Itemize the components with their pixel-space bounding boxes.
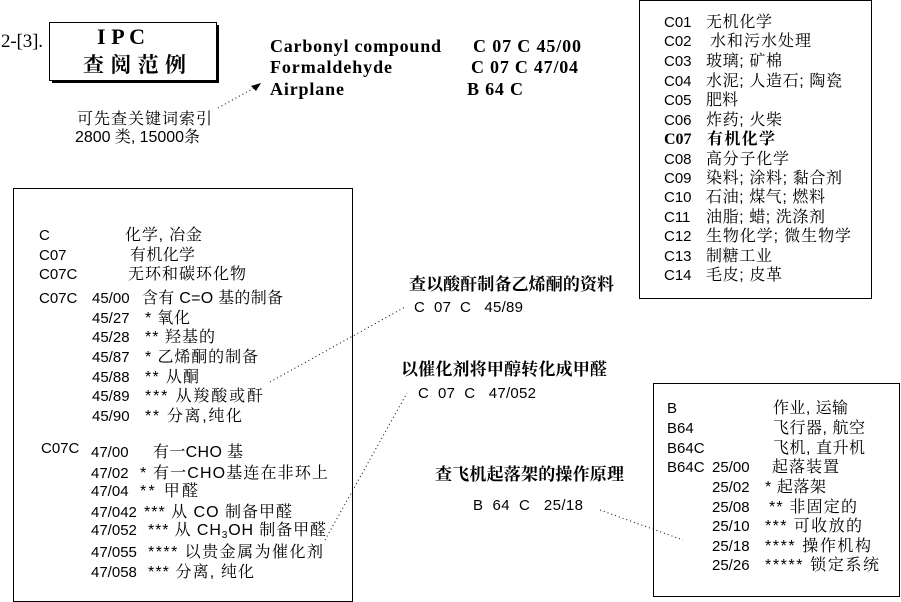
arrow: note to keywords <box>218 83 261 108</box>
panel: C section classes: 玻璃; 矿棉 <box>706 52 782 70</box>
panel: C section classes: 肥料 <box>706 91 738 109</box>
panel: C07C classification detail: 45/88 <box>92 369 130 386</box>
panel: C07C classification detail: * 氧化 <box>145 309 190 327</box>
panel: C07C classification detail: 有一CHO 基 <box>153 443 243 461</box>
title box: I P C <box>97 24 145 49</box>
panel: C07C classification detail: ** 羟基的 <box>145 328 215 346</box>
panel: C07C classification detail: C <box>39 227 50 244</box>
example 3: landing gear: 查飞机起落架的操作原理 <box>435 464 624 484</box>
keyword classification list: Airplane <box>270 79 344 99</box>
panel: C section classes: C02 <box>664 33 692 50</box>
panel: C section classes: 石油; 煤气; 燃料 <box>706 188 825 206</box>
panel: C07C classification detail: *** 从 CH <box>148 522 221 539</box>
panel: B64C classification detail: 25/02 <box>712 479 750 496</box>
panel: C section classes: C08 <box>664 151 692 168</box>
panel: C07C classification detail: 45/90 <box>92 408 130 425</box>
panel: C07C classification detail: C07C <box>39 290 78 307</box>
panel: C07C classification detail: 45/00 <box>92 290 130 307</box>
panel: C07C classification detail: 45/87 <box>92 349 130 366</box>
panel: C07C classification detail: 47/04 <box>91 483 129 500</box>
panel: C section classes: 高分子化学 <box>706 149 789 168</box>
example 3: landing gear: B 64 C 25/18 <box>473 497 583 514</box>
example 1: ketene from anhydride: 查以酸酐制备乙烯酮的资料 <box>409 274 614 294</box>
example 2: methanol to formaldehyde <box>401 359 607 402</box>
panel: B64C classification detail: B64C <box>667 459 705 476</box>
panel: C07C classification detail: * 有一CHO基连在非环上 <box>140 464 328 482</box>
panel: C section classes: 染料; 涂料; 黏合剂 <box>706 169 842 187</box>
panel: C07C classification detail: 47/058 <box>91 564 137 581</box>
panel: C07C classification detail: 45/27 <box>92 310 130 327</box>
panel: C section classes: C01 <box>664 14 692 31</box>
panel: B64C classification detail: 25/18 <box>712 538 750 555</box>
panel: C07C classification detail: 有机化学 <box>130 246 195 264</box>
panel: B64C classification detail: 作业, 运输 <box>773 399 848 417</box>
panel: C section classes: C07 <box>664 131 692 148</box>
panel: C07C classification detail: 47/055 <box>91 544 137 561</box>
panel: C section classes: C11 <box>664 209 690 226</box>
panel: B64C classification detail: 飞机, 直升机 <box>773 439 865 457</box>
panel: C section classes: C12 <box>664 228 692 245</box>
example 2: methanol to formaldehyde: C 07 C 47/052 <box>418 385 536 402</box>
panel: C07C classification detail: OH 制备甲醛 <box>228 521 326 539</box>
section number: 2-[3]. <box>1 31 43 52</box>
panel: C section classes: 炸药; 火柴 <box>706 111 782 129</box>
panel: C07C classification detail: *** 从 CO 制备甲醛 <box>144 503 292 521</box>
panel: C07C classification detail: C07 <box>39 247 67 264</box>
panel: B64C classification detail: B64 <box>667 420 694 437</box>
example 3: landing gear <box>435 464 624 514</box>
panel: C07C classification detail: 47/052 <box>91 522 137 539</box>
panel: C07C classification detail: 化学, 冶金 <box>125 226 202 244</box>
panel: C07C classification detail: ** 分离,纯化 <box>145 407 242 425</box>
keyword classification list: Carbonyl compound <box>270 36 441 56</box>
keyword index note: 2800 类, 15000条 <box>75 128 200 146</box>
panel: C section classes <box>640 0 872 298</box>
panel: B64C classification detail: B64C <box>667 440 705 457</box>
panel: C07C classification detail: 无环和碳环化物 <box>128 265 246 283</box>
dotted connector: 47/052 <box>325 393 407 540</box>
panel: C section classes: C04 <box>664 73 692 90</box>
keyword classification list: B 64 C <box>467 79 523 99</box>
panel: B64C classification detail: * 起落架 <box>765 477 826 496</box>
keyword index note <box>75 109 212 146</box>
dotted connector: 45/89 <box>270 307 405 382</box>
panel: B64C classification detail: ***** 锁定系统 <box>765 555 879 574</box>
panel: B64C classification detail: **** 操作机构 <box>765 537 871 555</box>
panel: C section classes: C14 <box>664 267 692 284</box>
panel: C07C classification detail: 45/89 <box>92 388 130 405</box>
example 1: ketene from anhydride: C 07 C 45/89 <box>414 299 523 316</box>
title box: 查阅范例 <box>83 53 186 77</box>
panel: B64C classification detail: 25/00 <box>712 459 750 476</box>
panel: B64C classification detail: B <box>667 400 677 417</box>
panel: C07C classification detail: **** 以贵金属为催化剂 <box>148 542 323 561</box>
panel: C07C classification detail: 47/02 <box>91 465 129 482</box>
keyword index note: 可先查关键词索引 <box>77 109 212 128</box>
panel: B64C classification detail: *** 可收放的 <box>765 517 862 535</box>
panel: B64C classification detail: 25/10 <box>712 518 750 535</box>
panel: C07C classification detail: * 乙烯酮的制备 <box>145 347 258 366</box>
panel: C07C classification detail: 3 <box>222 530 228 541</box>
keyword classification list: C 07 C 45/00 <box>473 36 581 56</box>
panel: C07C classification detail: 45/28 <box>92 329 130 346</box>
panel: C07C classification detail: 47/00 <box>91 444 129 461</box>
panel: C section classes: 水和污水处理 <box>710 32 811 50</box>
panel: C section classes: 有机化学 <box>707 126 775 149</box>
panel: C section classes: 无机化学 <box>706 13 772 31</box>
panel: C section classes: 油脂; 蜡; 洗涤剂 <box>706 208 825 226</box>
panel: B64C classification detail: 飞行器, 航空 <box>773 419 865 437</box>
panel: C section classes: 制糖工业 <box>706 247 772 265</box>
dotted connector: 25/18 <box>600 510 683 540</box>
panel: C07C classification detail: C07C <box>41 440 80 457</box>
panel: C section classes: 生物化学; 微生物学 <box>706 227 851 245</box>
title box <box>50 22 219 83</box>
panel: C section classes: C09 <box>664 170 692 187</box>
panel: C07C classification detail: *** 分离, 纯化 <box>148 563 254 581</box>
panel: C section classes: C03 <box>664 53 692 70</box>
example 1: ketene from anhydride <box>409 274 614 316</box>
panel: C section classes: 毛皮; 皮革 <box>706 265 782 284</box>
example 2: methanol to formaldehyde: 以催化剂将甲醇转化成甲醛 <box>401 359 607 379</box>
panel: B64C classification detail: 25/08 <box>712 499 750 516</box>
keyword classification list: Formaldehyde <box>270 57 392 77</box>
panel: B64C classification detail <box>654 384 900 596</box>
panel: C section classes: 水泥; 人造石; 陶瓷 <box>706 72 842 90</box>
keyword classification list: C 07 C 47/04 <box>471 57 578 77</box>
panel: C section classes: C13 <box>664 248 692 265</box>
panel: C07C classification detail: ** 甲醛 <box>140 482 198 500</box>
panel: B64C classification detail: 25/26 <box>712 557 750 574</box>
panel: B64C classification detail: 起落装置 <box>772 457 839 476</box>
panel: C07C classification detail: 47/042 <box>91 504 137 521</box>
panel: B64C classification detail: ** 非固定的 <box>769 498 857 516</box>
panel: C07C classification detail: ** 从酮 <box>145 368 199 386</box>
panel: C07C classification detail: 含有 C=O 基的制备 <box>142 289 283 307</box>
panel: C07C classification detail <box>14 188 352 602</box>
panel: C section classes: C05 <box>664 92 692 109</box>
panel: C section classes: C06 <box>664 112 692 129</box>
keyword classification list <box>270 36 581 99</box>
panel: C07C classification detail: C07C <box>39 266 78 283</box>
panel: C section classes: C10 <box>664 189 692 206</box>
panel: C07C classification detail: *** 从羧酸或酐 <box>145 387 263 405</box>
